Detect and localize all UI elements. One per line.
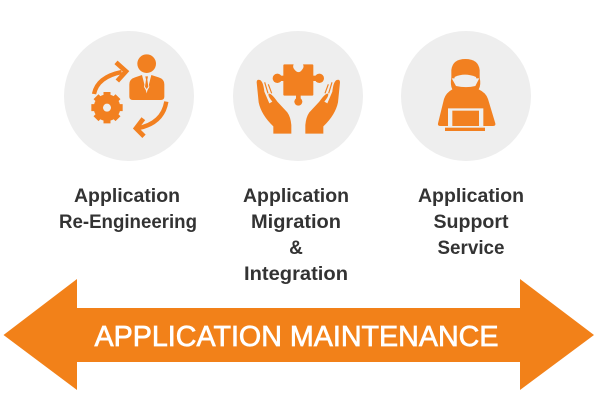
icon: support person with laptop — [401, 31, 531, 161]
label: application support service — [418, 186, 524, 259]
label: application support service: Service — [438, 238, 504, 259]
icon: puzzle in hands — [233, 31, 363, 161]
label: application migration and integration: Application — [243, 186, 349, 207]
label: application migration and integration: Migration — [251, 212, 341, 233]
label: application migration and integration: Integration — [244, 264, 348, 285]
label: application support service: Support — [434, 212, 509, 233]
banner title: APPLICATION MAINTENANCE — [94, 321, 498, 353]
label: application re-engineering: Application — [74, 186, 180, 207]
icon: re-engineering — [64, 31, 194, 161]
label: application migration and integration: & — [289, 238, 303, 259]
label: application support service: Application — [418, 186, 524, 207]
label: application re-engineering: Re-Engineering — [59, 212, 197, 233]
double-headed arrow banner — [4, 279, 594, 390]
label: application re-engineering — [59, 186, 197, 233]
label: application migration and integration — [243, 186, 349, 285]
